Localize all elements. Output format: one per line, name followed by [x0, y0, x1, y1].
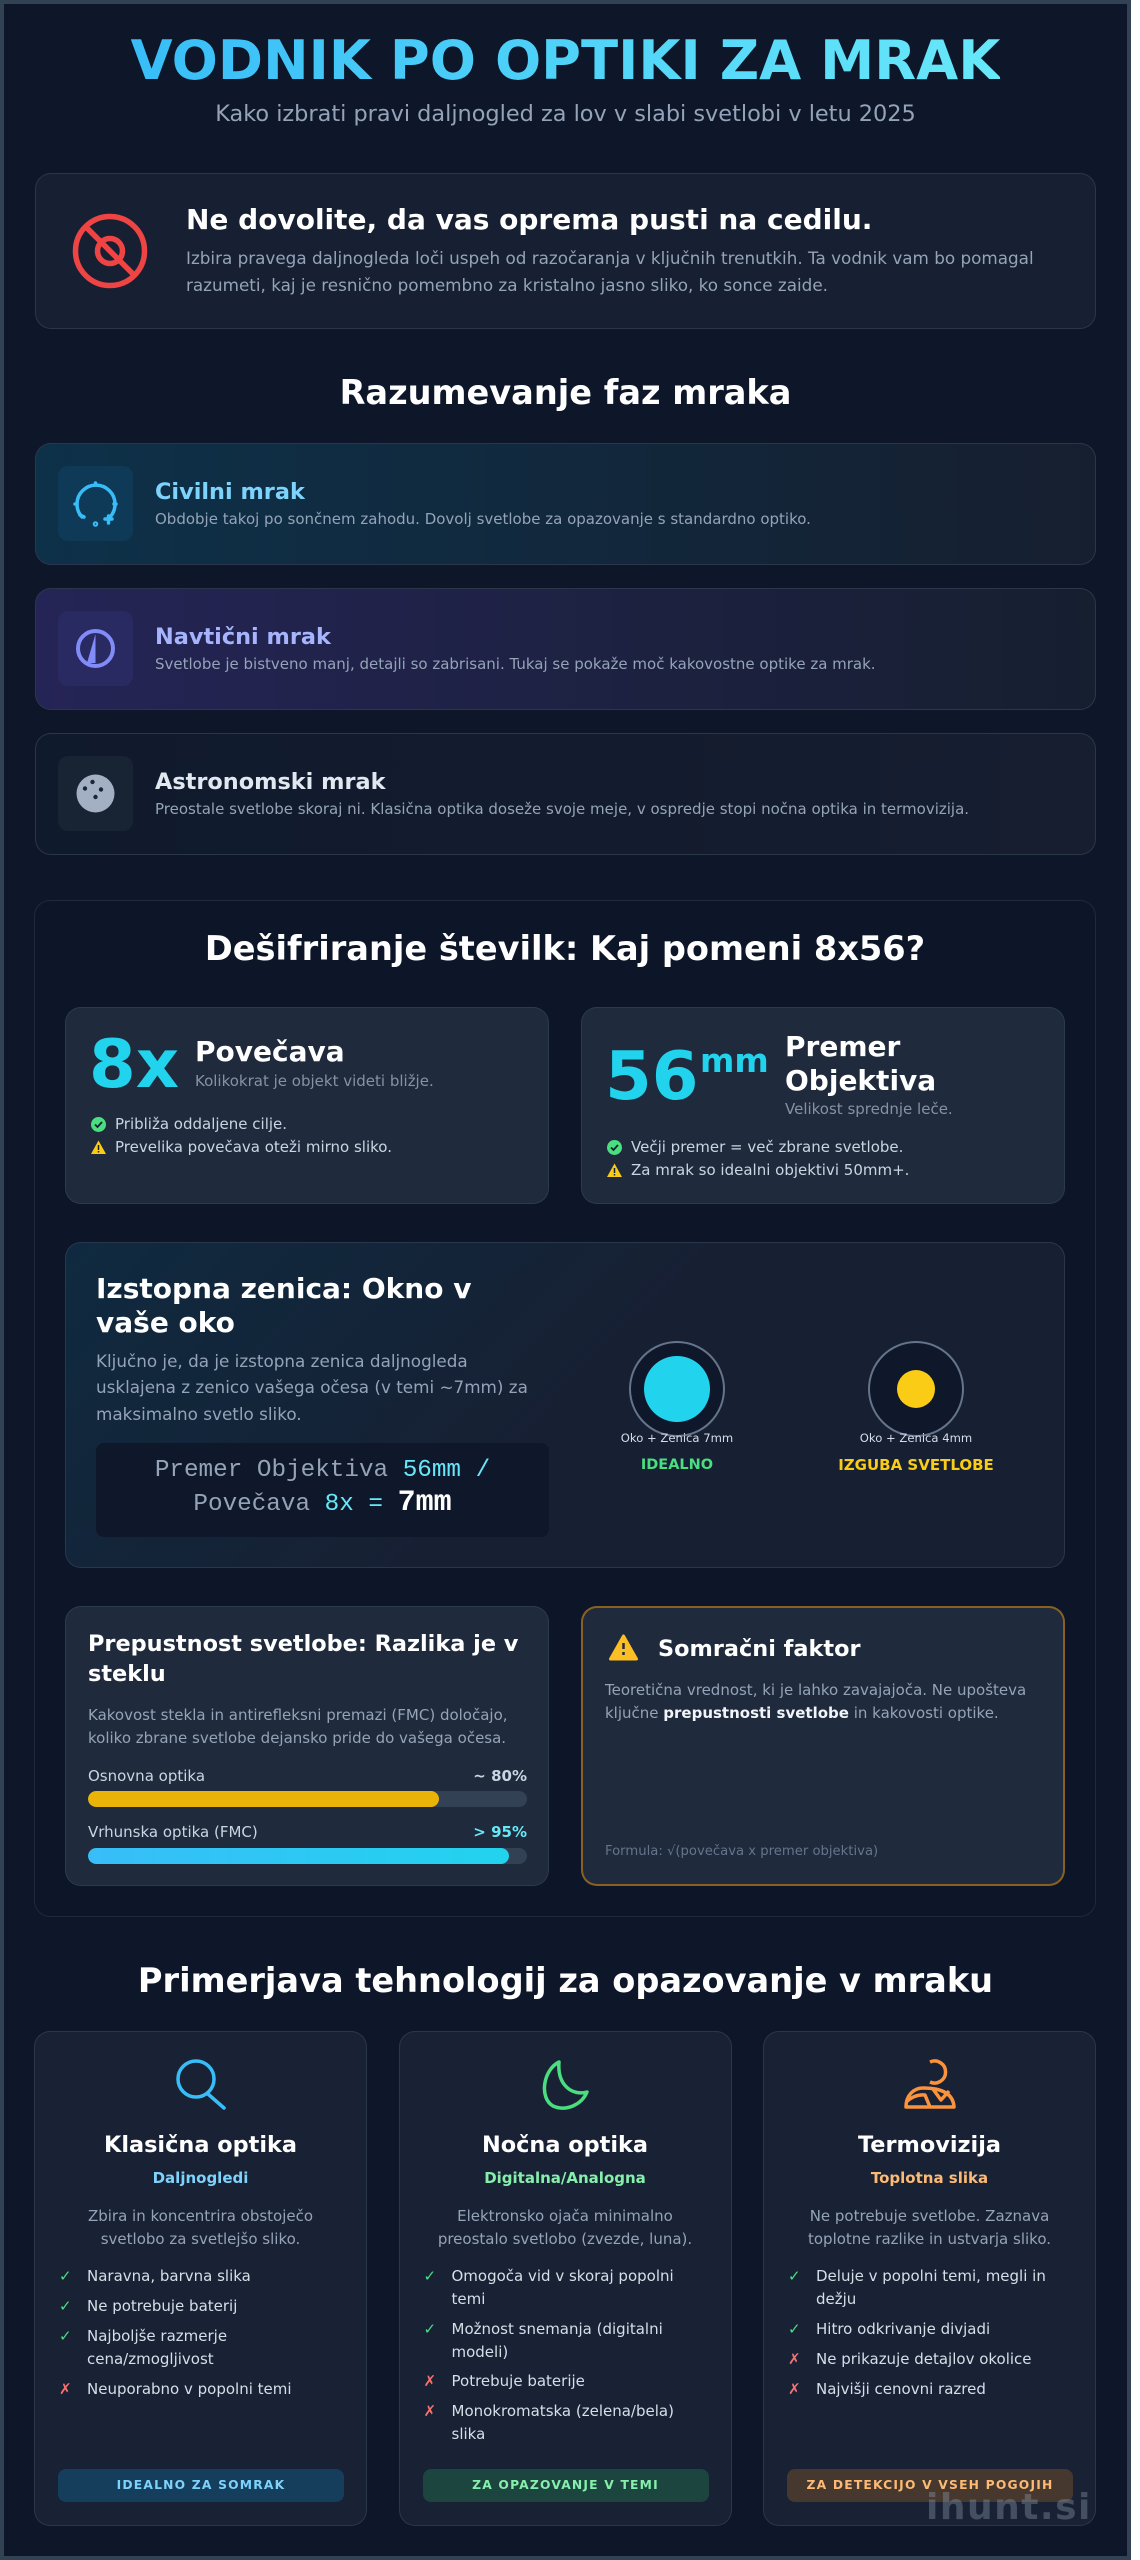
nautical twilight heading: Navtični mrak — [155, 624, 331, 650]
exit pupil text: usklajena z zenico vašega očesa (v temi ~7mm) za — [96, 1377, 528, 1397]
icon: crossed-out optics — [72, 214, 148, 288]
card: magnification — [65, 1007, 549, 1204]
exit pupil heading: Izstopna zenica: Okno v — [96, 1272, 471, 1305]
badge — [787, 2469, 1073, 2502]
item: Najvišji cenovni razred — [816, 2380, 986, 2398]
pros and cons — [424, 2267, 674, 2443]
magnification note: Kolikokrat je objekt videti bližje. — [195, 1072, 434, 1090]
badge — [422, 2469, 708, 2502]
eye circle — [868, 1341, 964, 1437]
unit mm: mm — [700, 1041, 769, 1080]
item — [424, 2267, 674, 2308]
thermal description — [808, 2207, 1051, 2248]
icon: astronomical twilight — [58, 756, 133, 831]
night vision description — [438, 2207, 692, 2248]
panel: astronomical twilight — [35, 733, 1096, 855]
verdict: IZGUBA SVETLOBE — [838, 1456, 994, 1474]
bar label: basic: Osnovna optika — [88, 1767, 205, 1785]
panel: decoding numbers — [34, 900, 1096, 1917]
badge: ZA OPAZOVANJE V TEMI — [472, 2478, 659, 2492]
pupil label: Oko + Zenica 7mm — [621, 1431, 733, 1445]
list item: Večji premer = več zbrane svetlobe. — [631, 1138, 903, 1156]
badge — [58, 2469, 344, 2502]
panel: civil twilight — [35, 443, 1096, 565]
eye circle — [629, 1341, 725, 1437]
card: thermal imaging — [763, 2031, 1096, 2526]
transmission text: koliko zbrane svetlobe dejansko pride do vašega očesa. — [88, 1729, 506, 1747]
factor text — [604, 1681, 1026, 1722]
item: cena/zmogljivost — [87, 2350, 214, 2368]
nautical twilight text: Svetlobe je bistveno manj, detajli so zabrisani. Tukaj se pokaže moč kakovostne optike za mrak. — [155, 655, 876, 673]
pupil 4mm — [897, 1370, 935, 1408]
night vision heading: Nočna optika — [482, 2132, 648, 2158]
badge: ZA DETEKCIJO V VSEH POGOJIH — [806, 2478, 1054, 2492]
icon: civil twilight — [58, 466, 133, 541]
panel: nautical twilight — [35, 588, 1096, 710]
formula note: Formula: √(povečava x premer objektiva) — [605, 1844, 878, 1859]
panel: intro callout — [35, 173, 1096, 329]
item — [424, 2402, 674, 2443]
exit pupil text — [96, 1351, 528, 1424]
bar value: premium: > 95% — [473, 1823, 527, 1841]
list item: Približa oddaljene cilje. — [115, 1115, 287, 1133]
subtitle: Kako izbrati pravi daljnogled za lov v slabi svetlobi v letu 2025 — [215, 101, 916, 127]
pros and cons: ✓ — [424, 2267, 436, 2285]
item: modeli) — [452, 2343, 508, 2361]
item — [59, 2327, 227, 2368]
thermal description: Ne potrebuje svetlobe. Zaznava — [810, 2207, 1049, 2225]
factor text: ključne prepustnosti svetlobe in kakovosti optike. — [605, 1704, 999, 1722]
watermark: ihunt.si — [926, 2487, 1092, 2528]
item: Omogoča vid v skoraj popolni — [452, 2267, 674, 2285]
diagram: ideal pupil — [621, 1341, 733, 1473]
astronomical twilight text: Preostale svetlobe skoraj ni. Klasična optika doseže svoje meje, v ospredje stopi nočna optika in termovizija. — [155, 800, 969, 818]
pros and cons — [788, 2267, 1046, 2398]
item: slika — [452, 2425, 485, 2443]
item: temi — [452, 2290, 485, 2308]
pros and cons: ✓ — [59, 2297, 72, 2315]
exit pupil text: maksimalno svetlo sliko. — [96, 1404, 302, 1424]
exit pupil text: Ključno je, da je izstopna zenica daljnogleda — [96, 1351, 468, 1371]
heading: technology comparison: Primerjava tehnologij za opazovanje v mraku — [138, 1961, 993, 2000]
bar label: premium: Vrhunska optika (FMC) — [88, 1823, 258, 1841]
diagram: light loss pupil — [838, 1341, 994, 1474]
classic description: Zbira in koncentrira obstoječo — [88, 2207, 313, 2225]
diameter heading: Premer — [785, 1030, 900, 1063]
diameter heading — [785, 1030, 936, 1096]
pros and cons: ✓ — [788, 2320, 801, 2338]
night vision description: preostalo svetlobo (zvezde, luna). — [438, 2230, 692, 2248]
transmission heading: steklu — [88, 1661, 166, 1687]
pros and cons: ✗ — [788, 2380, 801, 2398]
item: Hitro odkrivanje divjadi — [816, 2320, 990, 2338]
item — [788, 2267, 1046, 2308]
formula box: Povečava 8x = 7mm — [193, 1486, 452, 1520]
item: Neuporabno v popolni temi — [87, 2380, 292, 2398]
card: night vision — [398, 2031, 732, 2526]
exit pupil heading — [96, 1272, 472, 1338]
exit pupil heading: vaše oko — [96, 1306, 235, 1338]
diameter heading: Objektiva — [785, 1064, 936, 1096]
bar value: basic: ~ 80% — [473, 1767, 527, 1785]
pros and cons: ✗ — [788, 2350, 801, 2368]
intro text — [186, 248, 1034, 295]
civil twilight text: Obdobje takoj po sončnem zahodu. Dovolj svetlobe za opazovanje s standardno optiko. — [155, 510, 811, 528]
magnification heading: Povečava — [195, 1035, 345, 1068]
heading: twilight phases: Razumevanje faz mraka — [340, 373, 791, 412]
card: classic optics — [34, 2031, 367, 2526]
item: Ne potrebuje baterij — [87, 2297, 237, 2315]
thermal description: toplotne razlike in ustvarja sliko. — [808, 2230, 1051, 2248]
pros and cons: ✗ — [424, 2402, 436, 2420]
pupil 7mm — [644, 1356, 710, 1422]
bar: basic — [88, 1791, 527, 1807]
diameter note: Velikost sprednje leče. — [785, 1100, 953, 1118]
classic subtitle: Daljnogledi — [153, 2169, 248, 2187]
night vision subtitle: Digitalna/Analogna — [484, 2169, 646, 2187]
icon: nautical twilight — [58, 611, 133, 686]
heading: decoding numbers: Dešifriranje številk: Kaj pomeni 8x56? — [205, 929, 925, 968]
pros and cons: ✗ — [424, 2372, 436, 2390]
pupil label: Oko + Zenica 4mm — [860, 1431, 972, 1445]
item: Monokromatska (zelena/bela) — [452, 2402, 674, 2420]
card: exit pupil — [65, 1242, 1065, 1568]
item — [424, 2320, 663, 2361]
icon: person heat — [904, 2059, 956, 2109]
icon: magnifier — [176, 2059, 226, 2110]
factor heading: Somračni faktor — [658, 1636, 861, 1662]
formula box — [96, 1443, 549, 1537]
item: Ne prikazuje detajlov okolice — [816, 2350, 1032, 2368]
icon: warning — [609, 1634, 638, 1660]
classic description — [88, 2207, 313, 2248]
title: VODNIK PO OPTIKI ZA MRAK — [131, 29, 1000, 92]
night vision description: Elektronsko ojača minimalno — [457, 2207, 673, 2225]
badge: IDEALNO ZA SOMRAK — [117, 2478, 285, 2492]
intro text: Izbira pravega daljnogleda loči uspeh od razočaranja v ključnih trenutkih. Ta vodnik vam bo pomagal — [186, 248, 1034, 268]
card: objective diameter — [581, 1007, 1065, 1204]
intro heading: Ne dovolite, da vas oprema pusti na cedilu. — [186, 203, 872, 236]
classic heading: Klasična optika — [104, 2132, 297, 2158]
transmission heading: Prepustnost svetlobe: Razlika je v — [88, 1631, 518, 1657]
verdict: IDEALNO — [641, 1457, 713, 1473]
classic description: svetlobo za svetlejšo sliko. — [101, 2230, 300, 2248]
icon: moon — [542, 2060, 589, 2110]
pros and cons: ✓ — [788, 2267, 801, 2285]
item: dežju — [816, 2290, 856, 2308]
card: light transmission — [65, 1606, 549, 1886]
transmission heading — [88, 1631, 518, 1687]
big number 56: 56 — [605, 1037, 698, 1115]
pros and cons: ✓ — [59, 2267, 72, 2285]
pros and cons: ✓ — [424, 2320, 436, 2338]
bar: premium — [88, 1848, 527, 1864]
pros and cons: ✗ — [59, 2380, 72, 2398]
item: Možnost snemanja (digitalni — [452, 2320, 663, 2338]
astronomical twilight heading: Astronomski mrak — [155, 769, 386, 795]
pros and cons — [59, 2267, 292, 2398]
item: Deluje v popolni temi, megli in — [816, 2267, 1046, 2285]
pros and cons: ✓ — [59, 2327, 72, 2345]
big number 8x: 8x — [89, 1025, 179, 1103]
civil twilight heading: Civilni mrak — [155, 479, 305, 505]
transmission text: Kakovost stekla in antirefleksni premazi (FMC) določajo, — [88, 1706, 508, 1724]
thermal subtitle: Toplotna slika — [871, 2169, 988, 2187]
item: Najboljše razmerje — [87, 2327, 227, 2345]
item: Naravna, barvna slika — [87, 2267, 251, 2285]
card: twilight factor — [581, 1606, 1065, 1886]
formula box: Premer Objektiva 56mm / — [155, 1457, 490, 1484]
transmission text — [88, 1706, 508, 1747]
intro text: razumeti, kaj je resnično pomembno za kristalno jasno sliko, ko sonce zaide. — [186, 275, 828, 295]
factor text: Teoretična vrednost, ki je lahko zavajajoča. Ne upošteva — [605, 1681, 1026, 1699]
thermal heading: Termovizija — [858, 2132, 1001, 2158]
list item: Za mrak so idealni objektivi 50mm+. — [631, 1161, 909, 1179]
list item: Prevelika povečava oteži mirno sliko. — [115, 1138, 392, 1156]
item: Potrebuje baterije — [452, 2372, 585, 2390]
